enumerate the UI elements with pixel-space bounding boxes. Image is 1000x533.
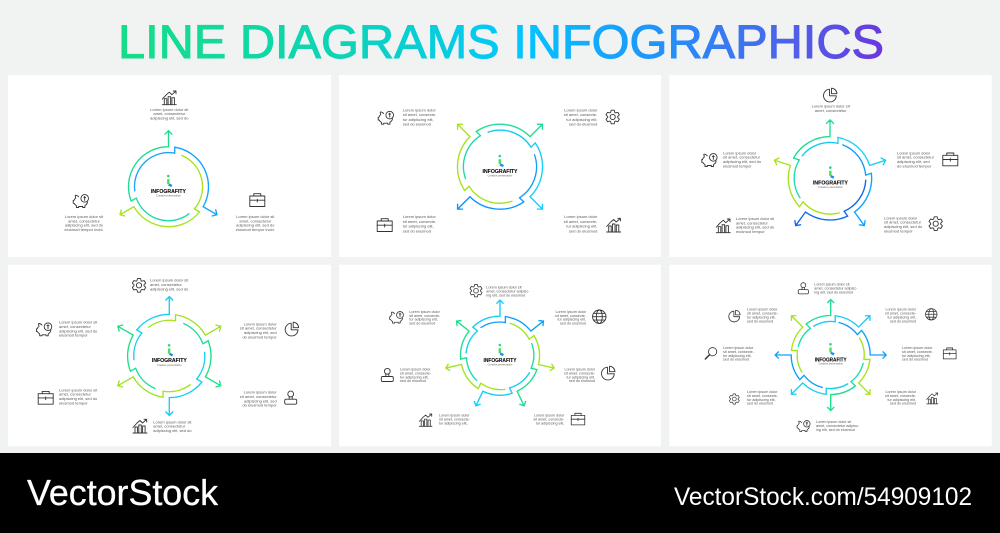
icon: pie chart (729, 310, 740, 322)
text block: lower right: Lorem ipsum dolor (534, 414, 565, 418)
text block: lower right: sit amet, consectetur (240, 394, 277, 399)
icon: chart (607, 218, 621, 232)
text block: top right: Lorem ipsum dolor (564, 107, 598, 112)
icon: person (381, 368, 393, 382)
text block: upper left: Lorem ipsum dolor (747, 308, 778, 312)
text block: lower left: Lorem ipsum dolor sit (736, 216, 775, 221)
text block: bottom: adipiscing elit, sed do (153, 428, 192, 433)
text block: upper right: Lorem ipsum dolor (897, 150, 931, 155)
text block: lower right: tur adipiscing elit, (888, 398, 916, 402)
ring with eight arrows (769, 293, 893, 417)
text block: left: sed do eiusmod (723, 358, 749, 362)
logo (151, 175, 186, 198)
logo: Creative presentation (818, 362, 844, 366)
text block: bottom: amet, consectetur adipisc- (816, 424, 860, 428)
text block: upper left: eiusmod tempor (723, 163, 752, 168)
text block: left: sed do eiusmod (400, 379, 426, 383)
text block: top: Lorem ipsum dolor sit (150, 278, 189, 283)
text block: lower left: sit amet, consecte- (747, 394, 779, 398)
text block: upper right: sit amet, consectetur (897, 155, 935, 160)
text block: right: adipiscing elit, sed do (236, 223, 275, 228)
text block: bottom: amet, consectetur (153, 424, 186, 429)
icon: chart (927, 393, 938, 404)
text block: right: amet, consectetur (239, 218, 272, 223)
logo (813, 166, 848, 189)
text block: upper right: Lorem ipsum dolor (244, 321, 277, 326)
text block: upper left: sit amet, consecte- (747, 312, 779, 316)
text block: bottom: Lorem ipsum dolor sit (153, 419, 192, 424)
text block: top right: sed do eiusmod (569, 122, 597, 127)
text block: lower left: adipiscing elit, sed do (736, 225, 775, 230)
text block: right: sed do eiusmod (902, 358, 928, 362)
text block: top: Lorem ipsum dolor sit (486, 286, 522, 290)
text block: lower right: Lorem ipsum dolor (884, 215, 918, 220)
text block: upper left: tur adipiscing elit, (747, 316, 776, 320)
text block: top left: Lorem ipsum dolor (403, 107, 436, 112)
text block: right: tur adipiscing elit, (566, 375, 595, 379)
text block: right: sed do eiusmod (569, 379, 595, 383)
text block: left: sit amet, consecte- (400, 371, 432, 375)
panel: six step diagram (8, 265, 331, 446)
text block: lower right: Lorem ipsum dolor (244, 390, 277, 395)
icon: gear (606, 110, 619, 124)
ring with seven arrows (435, 295, 562, 421)
text block: lower right: sit amet, consectetur (884, 220, 922, 225)
image id: VectorStock.com/54909102 (674, 483, 972, 511)
text block: lower left: Lorem ipsum dolor sit (59, 387, 98, 392)
text block: top right: sit amet, consecte- (564, 112, 598, 117)
footer bar (0, 453, 1000, 533)
icon: gear (729, 394, 739, 404)
text block: lower left: adipiscing elit, sed do (59, 396, 98, 401)
text block: left: sit amet, consecte- (723, 350, 755, 354)
text block: top: Lorem ipsum dolor sit (812, 103, 851, 108)
text block: upper left: sit amet, consectetur (723, 155, 761, 160)
text block: lower left: amet, consectetur (736, 220, 768, 225)
text block: left: tur adipiscing elit, (400, 375, 428, 379)
text block: bottom left: Lorem ipsum dolor (403, 214, 436, 219)
text block: left: amet, consectetur (68, 218, 101, 223)
text block: bottom right: sed do eiusmod (569, 229, 597, 234)
icon: briefcase (943, 348, 956, 359)
ring with five arrows (763, 120, 894, 247)
logo: Creative presentation (157, 363, 182, 367)
logo: Creative presentation (488, 173, 513, 177)
text block: left: Lorem ipsum dolor (723, 346, 754, 350)
text block: upper right: tur adipiscing elit, (558, 318, 586, 322)
text block: upper left: tur adipiscing elit, (409, 318, 438, 322)
text block: right: Lorem ipsum dolor (564, 367, 596, 371)
text block: lower left: tur adipiscing elit, (747, 398, 776, 402)
text block: bottom right: Lorem ipsum dolor (564, 214, 598, 219)
text block: left: Lorem ipsum dolor (400, 367, 431, 371)
icon: chart (133, 419, 147, 433)
text block: lower right: sed do eiusmod (890, 402, 916, 406)
text block: upper left: amet, consectetur (59, 324, 91, 329)
text block: upper left: Lorem ipsum dolor sit (59, 320, 98, 325)
text block: bottom left: sed do eiusmod (403, 229, 431, 234)
text block: lower right: sit amet, consecte- (533, 418, 565, 422)
text block: top: ing elit, sed do eiusmod (814, 291, 853, 295)
text block: upper right: sed do eiusmod (890, 320, 916, 324)
text block: upper left: adipiscing elit, sed do (723, 159, 762, 164)
brand name: VectorStock (27, 472, 219, 513)
text block: top: ing elit, sed do eiusmod (486, 294, 525, 298)
text block: upper left: Lorem ipsum dolor (409, 310, 441, 314)
text block: left: tur adipiscing elit, (723, 354, 752, 358)
icon: chart (419, 414, 432, 426)
icon: globe (926, 309, 937, 320)
logo: INFOGRAFITY (152, 358, 187, 364)
text block: upper left: Lorem ipsum dolor (723, 150, 757, 155)
logo: INFOGRAFITY (484, 358, 517, 364)
logo: Creative presentation (818, 185, 843, 189)
text block: top: amet, consectetur adipisc- (814, 287, 858, 291)
text block: upper left: eiusmod tempor (59, 333, 88, 338)
ring with six arrows (100, 296, 239, 416)
text block: upper right: sed do eiusmod (560, 322, 586, 326)
ring with three arrows (110, 131, 237, 249)
icon: briefcase (250, 194, 265, 206)
icon: piggy bank (797, 421, 810, 432)
text block: upper left: sit amet, consecte- (409, 314, 441, 318)
text block: upper right: sit amet, consecte- (555, 314, 587, 318)
text block: lower left: amet, consectetur (59, 392, 91, 397)
text block: lower right: adipiscing elit, sed (244, 398, 277, 403)
icon: person (798, 283, 808, 294)
icon: piggy bank (702, 154, 717, 166)
panel: five step diagram (669, 75, 992, 257)
text block: top right: tur adipiscing elit, (566, 117, 597, 122)
logo: INFOGRAFITY (813, 181, 848, 187)
icon: person (285, 391, 297, 404)
text block: lower right: eiusmod tempor (884, 228, 913, 233)
text block: upper right: do eiusmod tempor (242, 334, 277, 339)
icon: chart (162, 91, 176, 105)
text block: upper right: sit amet, consecte- (885, 312, 917, 316)
text block: lower left: sit amet, consecte- (439, 418, 471, 422)
text block: right: tur adipiscing elit, (902, 354, 930, 358)
icon: piggy bank (390, 312, 403, 323)
icon: piggy bank (73, 195, 88, 208)
logo: Creative presentation (156, 193, 181, 197)
text block: upper left: adipiscing elit, sed do (59, 328, 98, 333)
text block: bottom right: sit amet, consecte- (564, 219, 598, 224)
panel: seven step diagram (339, 265, 661, 446)
icon: briefcase (38, 391, 53, 404)
text block: lower left: tur adipiscing elit, (439, 422, 468, 426)
text block: top: amet, consectetur (153, 111, 186, 116)
logo: INFOGRAFITY (815, 357, 847, 363)
text block: top left: tur adipiscing elit, (403, 117, 434, 122)
icon: pie chart (824, 88, 837, 102)
text block: upper right: Lorem ipsum dolor (885, 308, 917, 312)
panel: eight step diagram (669, 265, 992, 446)
logo (484, 344, 517, 366)
text block: top left: sit amet, consecte- (403, 112, 437, 117)
text block: upper left: sed do eiusmod (747, 320, 773, 324)
text block: top: amet, consectetur adipisc- (486, 290, 530, 294)
icon: piggy bank (378, 111, 394, 124)
text block: top: amet, consectetur (150, 282, 182, 287)
text block: lower left: sed do eiusmod (747, 402, 773, 406)
icon: briefcase (943, 153, 958, 166)
text block: bottom left: sit amet, consecte- (403, 219, 437, 224)
text block: lower right: sit amet, consecte- (885, 394, 917, 398)
logo (815, 343, 847, 366)
text block: top left: sed do eiusmod (403, 122, 431, 127)
text block: right: sit amet, consecte- (564, 371, 596, 375)
ring with four arrows (428, 95, 572, 239)
panel: three step diagram (8, 75, 331, 257)
text block: left: Lorem ipsum dolor sit (65, 214, 104, 219)
text block: top: amet, consectetur (815, 108, 847, 113)
text block: lower right: do eiusmod tempor (242, 403, 277, 408)
text block: right: Lorem ipsum dolor (902, 346, 933, 350)
text block: upper right: sit amet, consectetur (240, 326, 277, 331)
text block: bottom left: tur adipiscing elit, (403, 224, 434, 229)
text block: right: sit amet, consecte- (902, 350, 934, 354)
panel: four step diagram (339, 75, 661, 257)
logo: Creative presentation (488, 362, 513, 366)
icon: gear (470, 285, 482, 297)
text block: left: adipiscing elit, sed do (65, 223, 104, 228)
text block: lower right: Lorem ipsum dolor (885, 390, 917, 394)
icon: briefcase (571, 413, 585, 425)
text block: bottom: Lorem ipsum dolor sit (816, 420, 851, 424)
text block: upper right: adipiscing elit, sed (897, 159, 930, 164)
text block: top: Lorem ipsum dolor sit (814, 283, 850, 287)
icon: gear (132, 278, 146, 292)
icon: gear (929, 217, 942, 231)
text block: top: Lorem ipsum dolor sit (150, 107, 189, 112)
text block: bottom: ing elit, sed do eiusmod (816, 428, 855, 432)
text block: upper left: sed do eiusmod (409, 322, 435, 326)
icon: pie chart (602, 366, 615, 380)
text block: top: adipiscing elit, sed do (150, 116, 189, 121)
text block: lower left: eiusmod tempor (59, 400, 88, 405)
text block: left: eiusmod tempor incid. (64, 227, 104, 232)
text block: upper right: tur adipiscing elit, (888, 316, 916, 320)
icon: piggy bank (36, 323, 52, 336)
text block: upper right: Lorem ipsum dolor (555, 310, 587, 314)
text block: right: eiusmod tempor incid. (236, 227, 275, 232)
text block: lower left: Lorem ipsum dolor (439, 414, 470, 418)
text block: upper right: do eiusmod tempor (897, 163, 932, 168)
icon: briefcase (377, 219, 392, 232)
text block: lower right: tur adipiscing elit, (536, 422, 564, 426)
text block: lower right: adipiscing elit, sed do (884, 224, 923, 229)
logo (152, 344, 187, 367)
text block: lower left: eiusmod tempor (736, 229, 765, 234)
icon: chart (716, 219, 730, 233)
text block: right: Lorem ipsum dolor sit (236, 214, 275, 219)
icon: globe (593, 310, 606, 323)
text block: top: adipiscing elit, sed do (150, 286, 189, 291)
text block: bottom right: tur adipiscing elit, (566, 224, 597, 229)
title: LINE DIAGRAMS INFOGRAPHICS (118, 15, 884, 68)
logo: INFOGRAFITY (151, 189, 186, 195)
text block: lower left: Lorem ipsum dolor (747, 390, 778, 394)
logo (482, 155, 518, 178)
text block: upper right: adipiscing elit, sed (244, 330, 277, 335)
logo: INFOGRAFITY (482, 169, 518, 175)
icon: pie chart (285, 322, 299, 336)
icon: magnifier (705, 348, 717, 359)
